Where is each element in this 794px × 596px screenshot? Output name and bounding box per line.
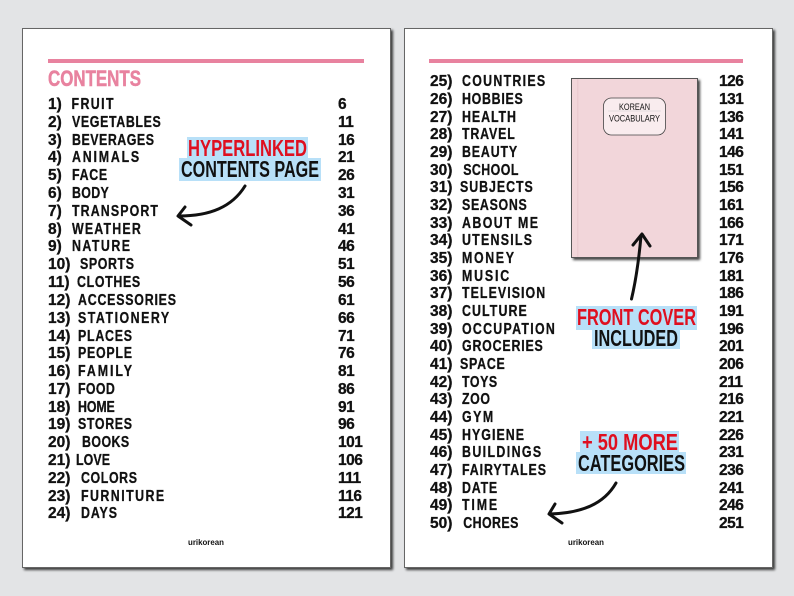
page numbers: 61 xyxy=(338,292,355,309)
item numbers: 16) xyxy=(48,363,70,380)
category names: TRAVEL xyxy=(462,125,515,142)
page numbers: 211 xyxy=(719,374,743,391)
item numbers: 21) xyxy=(48,452,70,469)
category names: GYM xyxy=(462,408,493,425)
item numbers: 17) xyxy=(48,381,70,398)
page numbers xyxy=(719,73,744,532)
item numbers: 2) xyxy=(48,114,62,131)
category names: SPACE xyxy=(460,355,505,372)
contents list: items 1 to 24 xyxy=(48,95,363,522)
category names: GROCERIES xyxy=(462,337,543,354)
item numbers: 28) xyxy=(430,126,452,143)
category names: WEATHER xyxy=(72,220,141,237)
page numbers: 36 xyxy=(338,203,355,220)
page numbers: 101 xyxy=(338,434,363,451)
category names: TIME xyxy=(462,496,497,513)
page numbers: 141 xyxy=(719,126,744,143)
page numbers: 26 xyxy=(338,167,355,184)
page numbers: 116 xyxy=(338,488,362,505)
category names: NATURE xyxy=(72,237,130,254)
item numbers: 35) xyxy=(430,250,452,267)
page numbers: 221 xyxy=(719,409,744,426)
panel: right contents page xyxy=(404,28,772,568)
category names: COLORS xyxy=(81,469,137,486)
page numbers: 146 xyxy=(719,144,744,161)
pink header bar xyxy=(48,59,364,63)
page numbers: 86 xyxy=(338,381,355,398)
category names: FAIRYTALES xyxy=(462,461,546,478)
footer brand: right page: urikorean xyxy=(568,538,604,547)
item numbers: 34) xyxy=(430,232,452,249)
category names: ZOO xyxy=(462,390,490,407)
page numbers: 161 xyxy=(719,197,744,214)
category names: SUBJECTS xyxy=(460,178,533,195)
category names: STORES xyxy=(78,415,132,432)
item numbers: 31) xyxy=(430,179,452,196)
page numbers: 186 xyxy=(719,285,744,302)
callout: front cover included xyxy=(576,304,697,351)
cover title label: KOREAN xyxy=(619,102,650,112)
category names: BEAUTY xyxy=(462,143,518,160)
category names: BOOKS xyxy=(82,433,129,450)
category names: FOOD xyxy=(78,380,115,397)
arrow: to chores xyxy=(549,483,616,523)
category names: SPORTS xyxy=(80,255,134,272)
callout: front cover included: FRONT COVER xyxy=(577,304,696,330)
item numbers: 3) xyxy=(48,132,62,149)
item numbers: 24) xyxy=(48,505,70,522)
cover spine line xyxy=(577,79,578,257)
page sheet xyxy=(22,28,390,568)
page numbers: 16 xyxy=(338,132,355,149)
category names xyxy=(72,95,176,521)
item numbers: 43) xyxy=(430,391,452,408)
callout: 50 more categories xyxy=(576,429,686,476)
page numbers: 236 xyxy=(719,462,744,479)
page numbers: 251 xyxy=(719,515,744,532)
item numbers: 4) xyxy=(48,149,62,166)
item numbers: 32) xyxy=(430,197,452,214)
cover title label xyxy=(604,98,666,135)
category names: TOYS xyxy=(462,373,497,390)
page numbers: 201 xyxy=(719,338,744,355)
item numbers: 25) xyxy=(430,73,452,90)
page numbers: 6 xyxy=(338,96,347,113)
page numbers: 216 xyxy=(719,391,744,408)
item numbers: 49) xyxy=(430,497,452,514)
page numbers: 171 xyxy=(719,232,744,249)
page numbers: 91 xyxy=(338,399,355,416)
item numbers: 23) xyxy=(48,488,70,505)
page numbers: 106 xyxy=(338,452,363,469)
page numbers: 96 xyxy=(338,416,355,433)
item numbers: 15) xyxy=(48,345,70,362)
page numbers xyxy=(338,96,363,522)
page numbers: 156 xyxy=(719,179,744,196)
item numbers: 50) xyxy=(430,515,452,532)
category names: VEGETABLES xyxy=(72,113,161,130)
page numbers: 131 xyxy=(719,91,744,108)
category names: FRUIT xyxy=(72,95,114,112)
item numbers xyxy=(48,96,70,522)
item numbers: 20) xyxy=(48,434,70,451)
category names: TRANSPORT xyxy=(72,202,158,219)
page numbers: 31 xyxy=(338,185,355,202)
category names: TELEVISION xyxy=(462,284,545,301)
pink header bar xyxy=(429,59,743,63)
callout: 50 more categories: + 50 MORE xyxy=(582,429,678,455)
item numbers: 26) xyxy=(430,91,452,108)
page sheet xyxy=(404,28,772,568)
callout: hyperlinked contents page: CONTENTS PAGE xyxy=(181,156,319,182)
item numbers: 6) xyxy=(48,185,62,202)
page numbers: 166 xyxy=(719,215,744,232)
category names: SCHOOL xyxy=(463,161,519,178)
panel: left contents page xyxy=(22,28,390,568)
item numbers: 38) xyxy=(430,303,452,320)
item numbers: 33) xyxy=(430,215,452,232)
page numbers: 151 xyxy=(719,162,744,179)
category names: OCCUPATION xyxy=(462,320,555,337)
item numbers: 41) xyxy=(430,356,452,373)
page numbers: 231 xyxy=(719,444,744,461)
item numbers: 9) xyxy=(48,238,62,255)
category names: STATIONERY xyxy=(78,309,170,326)
page numbers: 176 xyxy=(719,250,744,267)
arrow: to contents list xyxy=(178,186,245,225)
category names: FAMILY xyxy=(78,362,133,379)
page numbers: 246 xyxy=(719,497,744,514)
page numbers: 81 xyxy=(338,363,355,380)
item numbers: 40) xyxy=(430,338,452,355)
item numbers: 29) xyxy=(430,144,452,161)
callout: hyperlinked contents page xyxy=(179,135,321,182)
category names: LOVE xyxy=(76,451,110,468)
category names: UTENSILS xyxy=(462,231,532,248)
heading: contents: CONTENTS xyxy=(48,66,141,91)
item numbers: 1) xyxy=(48,96,62,113)
category names: CLOTHES xyxy=(77,273,140,290)
footer brand: left page: urikorean xyxy=(188,538,224,547)
category names: FACE xyxy=(72,166,107,183)
item numbers: 19) xyxy=(48,416,70,433)
item numbers: 36) xyxy=(430,268,452,285)
category names: BODY xyxy=(72,184,109,201)
category names: DAYS xyxy=(81,504,117,521)
item numbers: 18) xyxy=(48,399,70,416)
contents list: items 25 to 50 xyxy=(430,72,744,532)
item numbers: 27) xyxy=(430,109,452,126)
category names: FURNITURE xyxy=(81,487,164,504)
item numbers: 11) xyxy=(48,274,70,291)
page numbers: 111 xyxy=(338,470,362,487)
category names: CULTURE xyxy=(462,302,527,319)
item numbers: 47) xyxy=(430,462,452,479)
callout: 50 more categories: CATEGORIES xyxy=(578,450,685,476)
page numbers: 46 xyxy=(338,238,355,255)
item numbers: 37) xyxy=(430,285,452,302)
item numbers: 22) xyxy=(48,470,70,487)
page numbers: 181 xyxy=(719,268,744,285)
category names: ACCESSORIES xyxy=(78,291,176,308)
category names: PEOPLE xyxy=(78,344,132,361)
page numbers: 121 xyxy=(338,505,363,522)
book cover illustration xyxy=(572,78,698,258)
category names: HYGIENE xyxy=(462,426,524,443)
page numbers: 206 xyxy=(719,356,744,373)
category names: HOBBIES xyxy=(462,90,523,107)
page numbers: 41 xyxy=(338,221,355,238)
page numbers: 126 xyxy=(719,73,744,90)
item numbers: 42) xyxy=(430,374,452,391)
item numbers: 14) xyxy=(48,328,70,345)
item numbers: 7) xyxy=(48,203,62,220)
category names: HEALTH xyxy=(462,108,516,125)
page numbers: 56 xyxy=(338,274,355,291)
category names: CHORES xyxy=(463,514,518,531)
callout: hyperlinked contents page: HYPERLINKED xyxy=(188,135,307,161)
page numbers: 226 xyxy=(719,427,744,444)
category names: DATE xyxy=(462,479,497,496)
category names: MUSIC xyxy=(462,267,509,284)
page numbers: 136 xyxy=(719,109,744,126)
item numbers: 12) xyxy=(48,292,70,309)
callout: front cover included: INCLUDED xyxy=(594,325,678,351)
page numbers: 196 xyxy=(719,321,744,338)
category names: ANIMALS xyxy=(72,148,139,165)
category names: PLACES xyxy=(78,327,132,344)
category names: ABOUT ME xyxy=(462,214,538,231)
category names: MONEY xyxy=(462,249,515,266)
category names: COUNTRIES xyxy=(462,72,545,89)
item numbers: 10) xyxy=(48,256,70,273)
category names: SEASONS xyxy=(462,196,527,213)
item numbers: 8) xyxy=(48,221,62,238)
page numbers: 21 xyxy=(338,149,355,166)
item numbers: 39) xyxy=(430,321,452,338)
item numbers: 48) xyxy=(430,480,452,497)
item numbers: 44) xyxy=(430,409,452,426)
category names: BEVERAGES xyxy=(72,131,154,148)
page numbers: 66 xyxy=(338,310,355,327)
category names xyxy=(460,72,555,531)
page numbers: 11 xyxy=(338,114,354,131)
page numbers: 191 xyxy=(719,303,744,320)
item numbers: 46) xyxy=(430,444,452,461)
page numbers: 51 xyxy=(338,256,355,273)
item numbers: 30) xyxy=(430,162,452,179)
category names: BUILDINGS xyxy=(462,443,541,460)
arrow: to front cover xyxy=(632,234,650,299)
item numbers: 13) xyxy=(48,310,70,327)
page numbers: 241 xyxy=(719,480,744,497)
item numbers xyxy=(430,73,452,532)
item numbers: 45) xyxy=(430,427,452,444)
page numbers: 76 xyxy=(338,345,355,362)
category names: HOME xyxy=(78,398,115,415)
cover title label: VOCABULARY xyxy=(609,114,660,124)
item numbers: 5) xyxy=(48,167,62,184)
page numbers: 71 xyxy=(338,328,355,345)
